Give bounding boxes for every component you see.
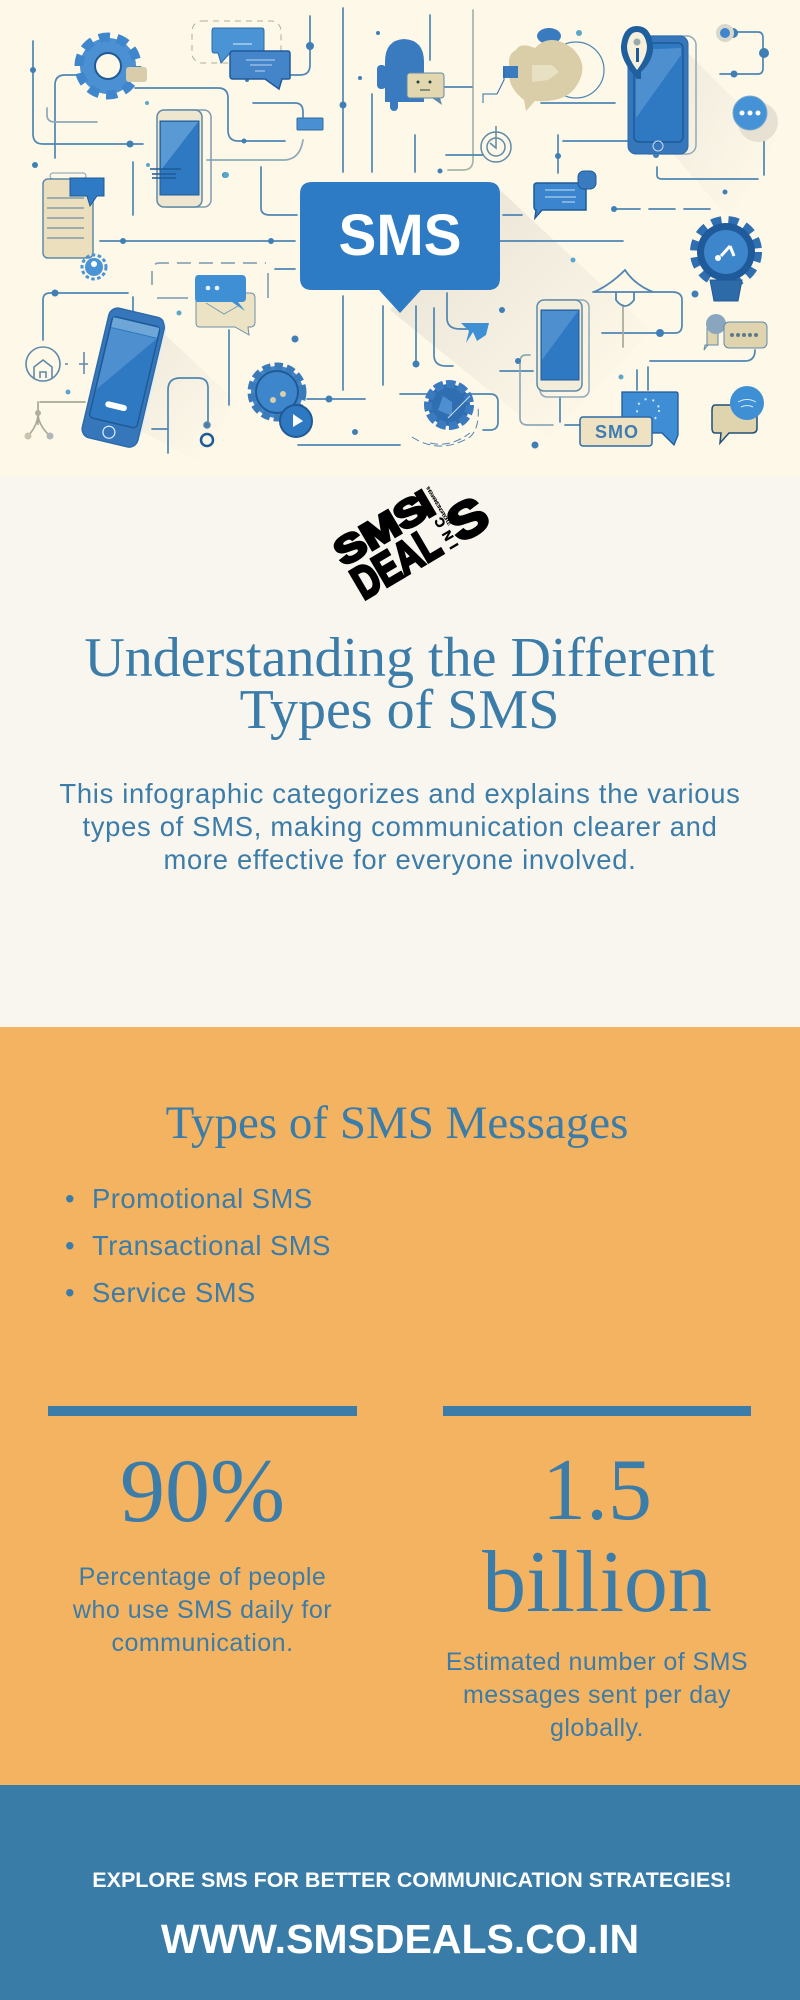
logo: THE MARKETING PEOPLE <box>424 486 452 528</box>
icon: document with bubble <box>43 173 106 279</box>
logo: DEAL <box>342 517 450 609</box>
stat description: who use SMS daily for <box>73 1596 332 1624</box>
icon: wifi bubble <box>712 386 764 443</box>
icon: paper plane <box>461 323 489 343</box>
heading: types of sms messages: Types of SMS Messages <box>166 1097 628 1149</box>
icon: phone upper left <box>150 110 211 207</box>
icon: tan cloud bubble <box>483 28 604 111</box>
icon: tilted phone <box>80 306 168 449</box>
intro text: more effective for everyone involved. <box>163 844 636 875</box>
icon: smo badge bubble <box>580 392 678 446</box>
icon: chat bubbles top <box>192 21 290 89</box>
stat description: messages sent per day <box>463 1681 731 1709</box>
icon: smo badge bubble: SMO <box>595 422 639 442</box>
title: Understanding the Different <box>84 627 715 689</box>
icon: main phone with bulb <box>621 26 696 154</box>
icon: small circuit nodes <box>24 347 213 446</box>
title: Types of SMS <box>240 679 559 741</box>
icon: small rectangle tag <box>297 118 323 130</box>
stat description <box>72 1563 332 1657</box>
stat description: globally. <box>550 1714 644 1742</box>
footer website: WWW.SMSDEALS.CO.IN <box>161 1916 639 1962</box>
stat value <box>482 1442 712 1631</box>
icon: bubbles with dots <box>704 314 767 350</box>
stat: 1.5 billion <box>443 1406 751 1766</box>
bullet list: • <box>65 1277 75 1308</box>
logo <box>327 486 498 609</box>
bullet list <box>65 1183 331 1308</box>
circuit lines <box>33 8 764 453</box>
stat value: 1.5 <box>542 1442 652 1539</box>
stat description: Percentage of people <box>79 1563 326 1591</box>
sms speech box <box>300 182 500 313</box>
icon: phone right lower <box>537 300 589 397</box>
logo: INC <box>431 514 461 552</box>
intro text <box>59 778 741 875</box>
icon: blue blob and bubble <box>716 24 778 142</box>
sms speech box: SMS <box>338 203 462 268</box>
intro text: This infographic categorizes and explains the various <box>59 778 741 809</box>
panel: hero illustration <box>24 7 778 458</box>
bullet list: Promotional SMS <box>92 1183 313 1214</box>
stat value: billion <box>482 1534 712 1631</box>
logo: SMS <box>327 488 434 575</box>
stat value: 90% <box>120 1442 285 1541</box>
panel: types and statistics <box>0 1027 800 1785</box>
icon: android robot <box>377 39 444 111</box>
icon: gear and play button <box>251 366 312 437</box>
bullet list: • <box>65 1183 75 1214</box>
icon: target <box>481 126 511 162</box>
stat description <box>446 1648 748 1742</box>
logo: S <box>437 486 498 553</box>
bullet list: • <box>65 1230 75 1261</box>
icon: gear top left <box>79 37 147 95</box>
footer tagline: EXPLORE SMS FOR BETTER COMMUNICATION STRATEGIES! <box>92 1868 732 1892</box>
icon: center right chat <box>534 171 596 218</box>
icon: lamp <box>594 270 653 306</box>
icon: large gear right <box>694 220 758 301</box>
icon: envelope bubble <box>195 275 255 335</box>
bullet list: Service SMS <box>92 1277 256 1308</box>
intro text: types of SMS, making communication clearer and <box>82 811 718 842</box>
dashed frame <box>152 263 268 298</box>
bullet list: Transactional SMS <box>92 1230 331 1261</box>
stat description: Estimated number of SMS <box>446 1648 748 1676</box>
icon: gear lower center <box>412 384 478 446</box>
title <box>84 627 715 741</box>
panel: footer call to action <box>0 1785 800 2000</box>
stat: 90% <box>48 1406 357 1676</box>
stat description: communication. <box>111 1629 294 1657</box>
